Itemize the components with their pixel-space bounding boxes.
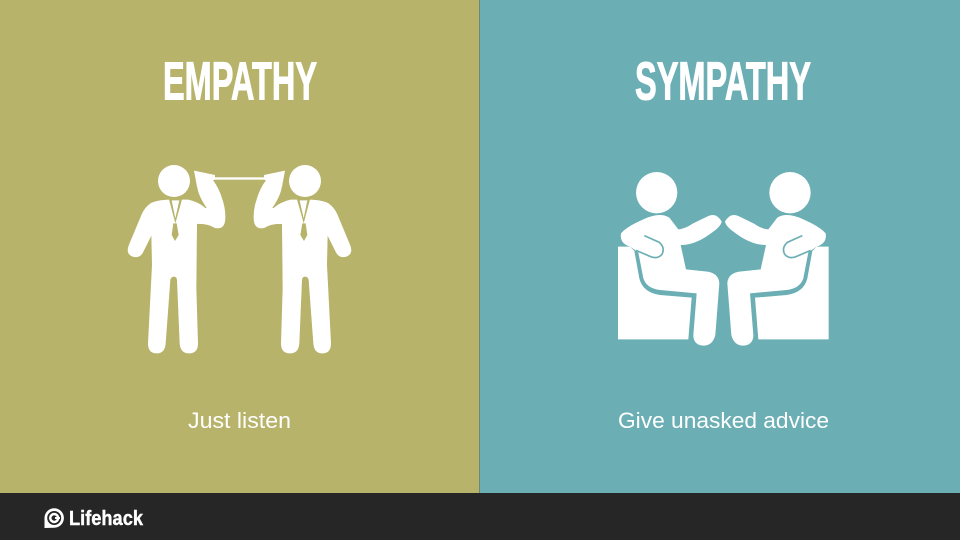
string between cans <box>213 177 266 180</box>
panel: empathy <box>0 0 479 493</box>
man left <box>128 165 225 353</box>
icon: two seated people talking <box>618 172 829 346</box>
person left <box>618 172 722 346</box>
caption: give unasked advice: Give unasked advice <box>618 408 829 433</box>
icon: two men with tin-can telephone <box>128 165 351 353</box>
title: empathy: EMPATHY <box>163 52 317 111</box>
caption: just listen: Just listen <box>188 408 291 433</box>
icon: lifehack logo <box>44 508 64 528</box>
person right <box>725 172 829 346</box>
panel: sympathy <box>479 0 960 493</box>
title: sympathy: SYMPATHY <box>635 52 811 111</box>
man right <box>254 165 351 353</box>
footer bar <box>0 493 960 540</box>
wordmark: lifehack: Lifehack <box>69 508 144 530</box>
